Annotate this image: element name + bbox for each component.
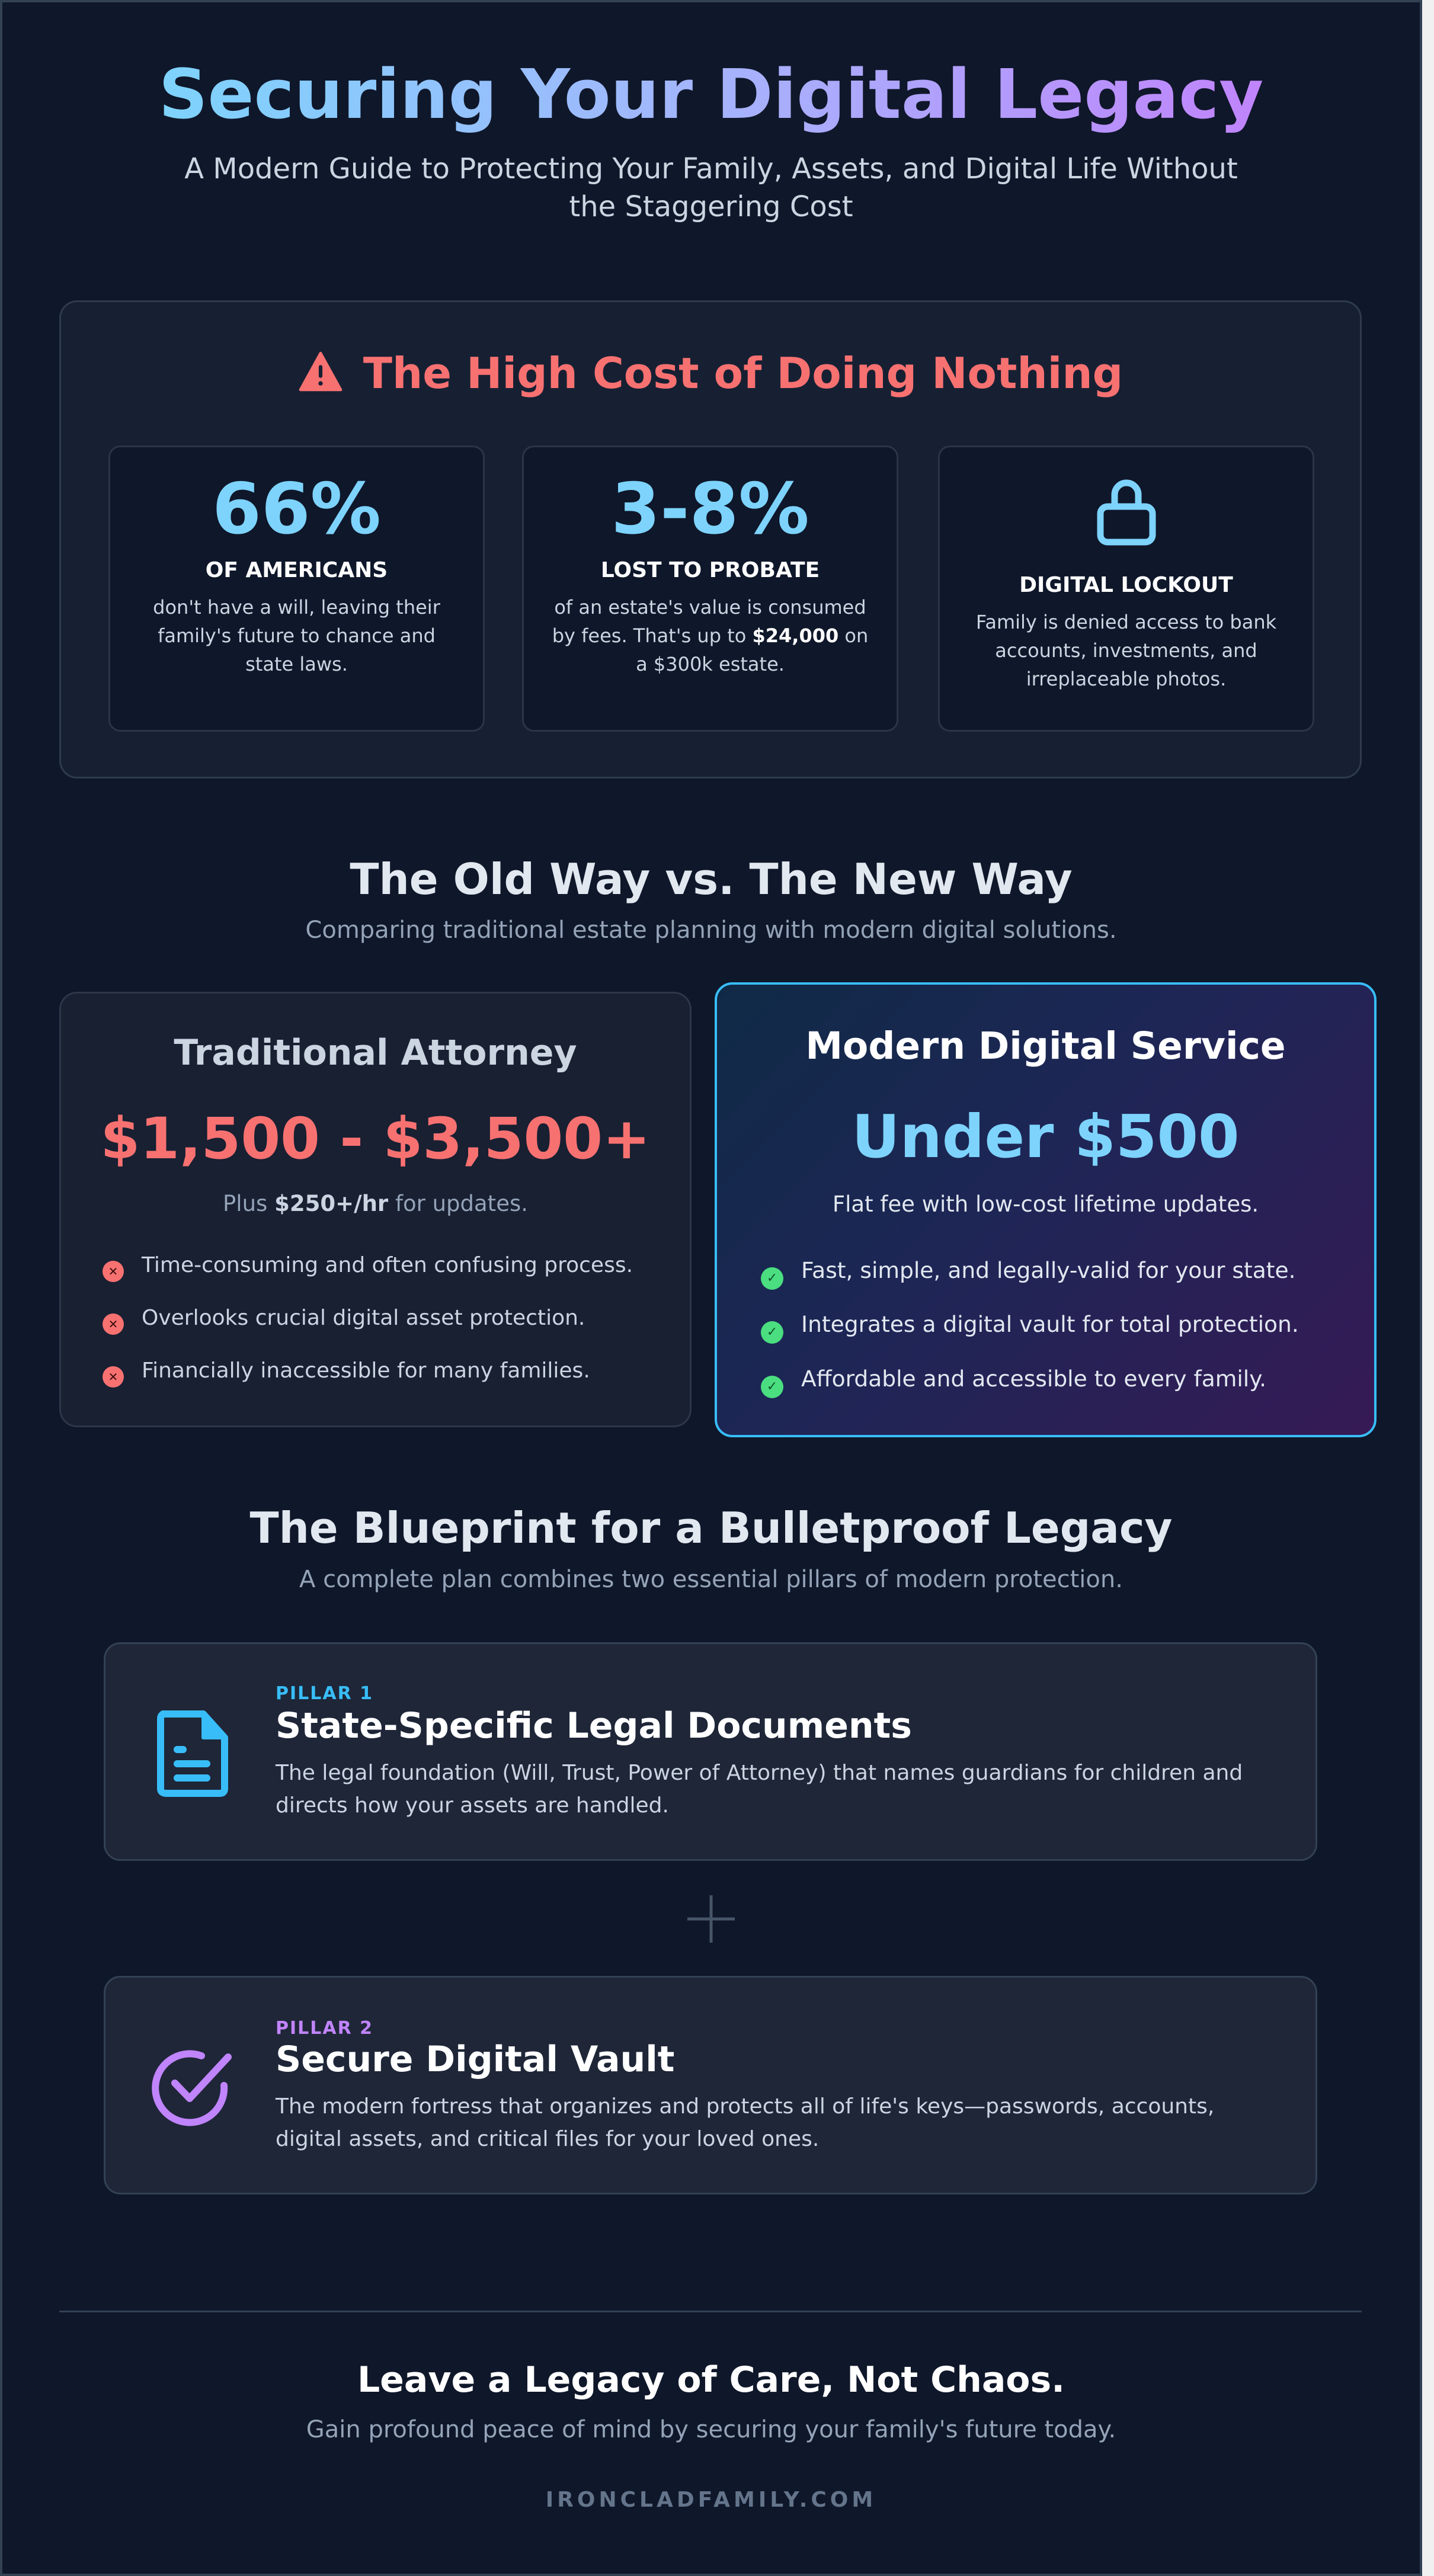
pillar title: Secure Digital Vault bbox=[276, 2039, 674, 2080]
card title: Modern Digital Service bbox=[805, 1024, 1286, 1068]
stat number: 66% bbox=[212, 469, 381, 550]
pillar description: digital assets, and critical files for your loved ones. bbox=[276, 2127, 819, 2151]
footer site: IRONCLADFAMILY.COM bbox=[546, 2488, 876, 2512]
card: 66% bbox=[108, 446, 485, 732]
footer heading: Leave a Legacy of Care, Not Chaos. bbox=[357, 2359, 1065, 2401]
footer subtext: Gain profound peace of mind by securing your family's future today. bbox=[306, 2416, 1116, 2443]
title: Securing Your Digital Legacy bbox=[159, 55, 1263, 134]
stat text: state laws. bbox=[245, 653, 348, 675]
stat label: DIGITAL LOCKOUT bbox=[1019, 573, 1233, 597]
item: ✓ bbox=[767, 1379, 777, 1394]
stat text: by fees. That's up to $24,000 on bbox=[552, 624, 868, 647]
pillar description bbox=[275, 2094, 1214, 2151]
icon: document bbox=[157, 1710, 228, 1797]
panel: pillar 1 bbox=[104, 1642, 1317, 1861]
pillar title: State-Specific Legal Documents bbox=[276, 1705, 912, 1747]
icon: lock bbox=[1097, 480, 1155, 545]
list: benefits bbox=[761, 1257, 1299, 1398]
item: Fast, simple, and legally-valid for your state. bbox=[801, 1257, 1296, 1283]
heading: old vs new: The Old Way vs. The New Way bbox=[350, 854, 1073, 904]
stat text: a $300k estate. bbox=[636, 653, 785, 675]
stat text: don't have a will, leaving their bbox=[153, 596, 440, 619]
subtitle: A Modern Guide to Protecting Your Family, Assets, and Digital Life Without bbox=[184, 152, 1238, 185]
stat text: irreplaceable photos. bbox=[1026, 668, 1226, 690]
price: $1,500 - $3,500+ bbox=[100, 1106, 651, 1172]
stat text: family's future to chance and bbox=[158, 624, 436, 647]
list: drawbacks bbox=[103, 1253, 633, 1388]
heading: blueprint: The Blueprint for a Bulletproof Legacy bbox=[250, 1503, 1172, 1553]
item: ✕ bbox=[108, 1370, 118, 1384]
panel: high cost bbox=[59, 300, 1362, 778]
price note: Flat fee with low-cost lifetime updates. bbox=[833, 1191, 1259, 1217]
item: ✓ bbox=[767, 1325, 777, 1340]
stat text bbox=[153, 596, 440, 675]
panel: pillar 2 bbox=[104, 1976, 1317, 2194]
pillar label: PILLAR 1 bbox=[276, 1683, 373, 1704]
price note: Plus $250+/hr for updates. bbox=[223, 1191, 528, 1216]
stat text bbox=[552, 596, 868, 675]
item: ✕ bbox=[108, 1317, 118, 1331]
card: digital lockout bbox=[938, 446, 1314, 732]
panel: modern digital service bbox=[715, 982, 1377, 1437]
item: ✕ bbox=[108, 1264, 118, 1279]
item: Integrates a digital vault for total protection. bbox=[801, 1311, 1299, 1337]
stat text bbox=[976, 611, 1276, 690]
pillar description: The legal foundation (Will, Trust, Power of Attorney) that names guardians for children and bbox=[276, 1761, 1243, 1785]
pillar description: directs how your assets are handled. bbox=[276, 1793, 669, 1818]
stat label: OF AMERICANS bbox=[206, 558, 388, 582]
item: Affordable and accessible to every family. bbox=[801, 1366, 1266, 1392]
stat number: 3-8% bbox=[611, 469, 809, 550]
panel: traditional attorney bbox=[59, 992, 692, 1427]
subheading: comparison: Comparing traditional estate planning with modern digital solutions. bbox=[305, 917, 1117, 944]
subheading: blueprint: A complete plan combines two essential pillars of modern protection. bbox=[299, 1566, 1123, 1593]
price: Under $500 bbox=[852, 1102, 1240, 1171]
stat text: Family is denied access to bank bbox=[976, 611, 1276, 633]
pillar description bbox=[275, 1761, 1243, 1818]
item: Financially inaccessible for many families. bbox=[142, 1359, 590, 1383]
card: 3-8% bbox=[522, 446, 898, 732]
subtitle: the Staggering Cost bbox=[569, 190, 853, 223]
item: Overlooks crucial digital asset protection. bbox=[142, 1306, 585, 1330]
subtitle bbox=[184, 152, 1238, 223]
icon: check circle bbox=[152, 2050, 232, 2126]
pillar description: The modern fortress that organizes and protects all of life's keys—passwords, accounts, bbox=[276, 2094, 1214, 2119]
stat text: accounts, investments, and bbox=[995, 639, 1257, 662]
heading: high cost: The High Cost of Doing Nothing bbox=[363, 348, 1123, 398]
card title: Traditional Attorney bbox=[174, 1032, 577, 1074]
stat text: of an estate's value is consumed bbox=[554, 596, 866, 619]
stat label: LOST TO PROBATE bbox=[601, 558, 820, 582]
item: ✓ bbox=[767, 1271, 777, 1286]
item: Time-consuming and often confusing process. bbox=[142, 1253, 633, 1277]
icon: plus bbox=[687, 1895, 735, 1943]
pillar label: PILLAR 2 bbox=[276, 2018, 373, 2039]
